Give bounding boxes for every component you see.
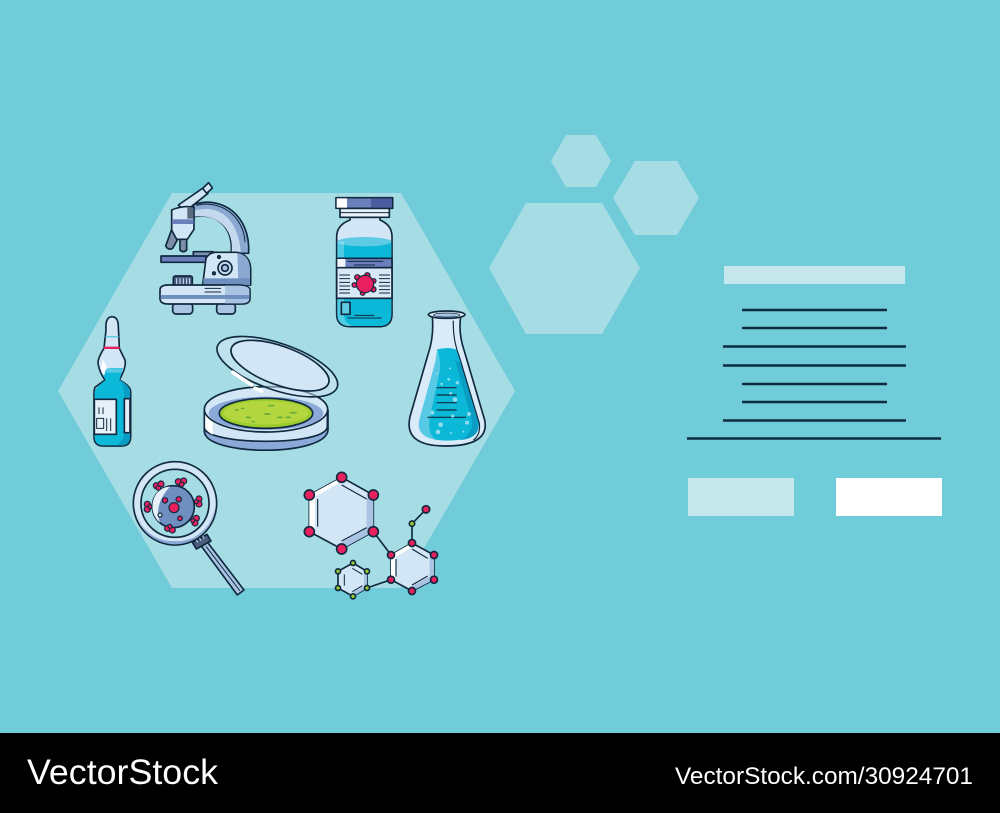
small hexagon ring [335, 560, 369, 599]
left button [688, 478, 794, 516]
icon: glass ampoule [94, 317, 131, 446]
icon: microscope [160, 183, 251, 314]
petri dish lid [210, 324, 345, 409]
icon: molecule structure [304, 472, 437, 599]
text placeholder lines [687, 310, 941, 438]
large hexagon ring [304, 472, 378, 554]
footer url text: VectorStock.com/30924701 [675, 763, 973, 790]
virus emblem [352, 273, 376, 295]
icon: petri dish [204, 324, 345, 450]
icon: medicine vial [336, 198, 393, 327]
footer logo text: VectorStock [27, 753, 219, 792]
footer band [0, 733, 1000, 813]
icon: erlenmeyer flask [409, 311, 485, 446]
right button [836, 478, 942, 516]
medium hexagon ring [387, 539, 437, 594]
title placeholder bar [724, 266, 905, 284]
large hexagon panel [58, 193, 515, 588]
icon: magnifying glass with virus [133, 462, 244, 595]
decorative hexagon cluster [489, 135, 699, 334]
virus spikes [150, 483, 196, 526]
